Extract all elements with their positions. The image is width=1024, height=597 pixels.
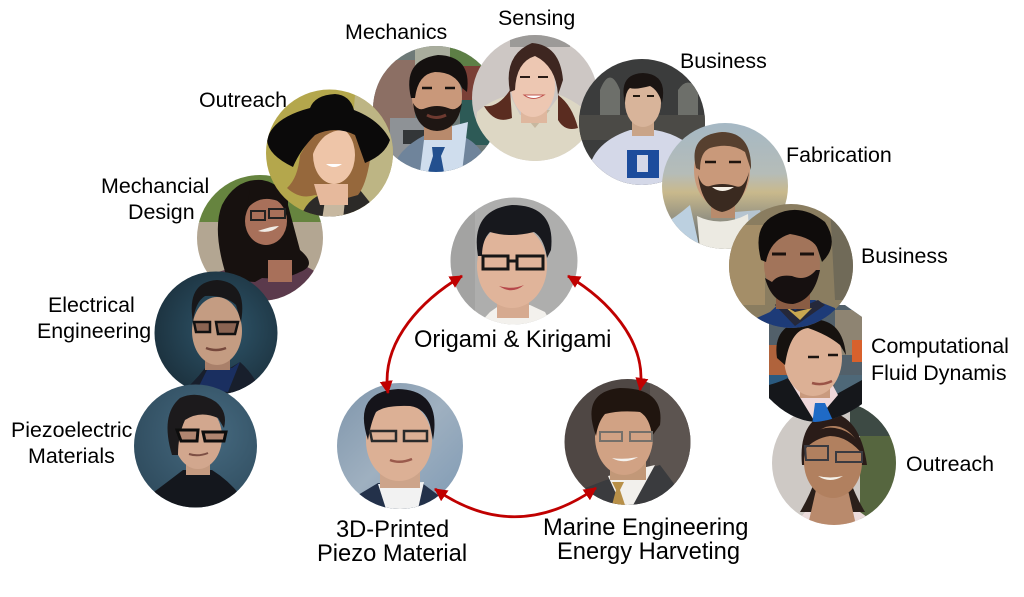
label: piezoelectric materials: Materials: [28, 444, 115, 468]
arrow: origami to marine: [568, 276, 641, 390]
label: computational fluid dynamics: Computational: [871, 334, 1009, 358]
label: fabrication: Fabrication: [786, 143, 892, 167]
portrait: 3D-printed piezo material lead: [337, 383, 463, 509]
label: computational fluid dynamics: Fluid Dynamis: [871, 361, 1007, 385]
label: sensing: Sensing: [498, 6, 575, 30]
label: mechanical design: Mechancial: [101, 174, 209, 198]
portrait: computational fluid dynamics: [769, 305, 862, 425]
label: outreach right: Outreach: [906, 452, 994, 476]
label: business right: Business: [861, 244, 948, 268]
label: piezoelectric materials: Piezoelectric: [11, 418, 132, 442]
label: business top: Business: [680, 49, 767, 73]
portrait: business: [579, 59, 705, 185]
arrow: origami to 3D-printed: [387, 276, 462, 393]
label: 3D-printed piezo material: Piezo Material: [317, 541, 467, 567]
label: mechanical design: Design: [128, 200, 195, 224]
portrait: origami and kirigami lead: [450, 197, 578, 325]
label: marine engineering energy harvesting: Marine Engineering: [543, 515, 748, 541]
arrow: 3D-printed to marine: [435, 488, 596, 517]
portrait: marine engineering lead: [564, 379, 692, 507]
portrait: outreach right: [772, 401, 896, 525]
portrait: sensing: [472, 35, 598, 161]
label: outreach top: Outreach: [199, 88, 287, 112]
portrait: mechanical design: [195, 175, 325, 307]
label: marine engineering energy harvesting: Energy Harveting: [557, 539, 740, 565]
portrait: outreach with hat: [265, 89, 395, 220]
label: mechanics: Mechanics: [345, 20, 447, 44]
portrait: fabrication: [662, 123, 788, 250]
label: 3D-printed piezo material: 3D-Printed: [336, 517, 449, 543]
portrait: piezoelectric materials: [134, 384, 258, 510]
portrait: business two: [729, 204, 853, 328]
label: electrical engineering: Engineering: [37, 319, 151, 343]
label: origami and kirigami: Origami & Kirigami: [414, 327, 611, 353]
portrait: electrical engineering: [154, 272, 278, 394]
label: electrical engineering: Electrical: [48, 293, 135, 317]
portrait: mechanics: [373, 46, 500, 172]
